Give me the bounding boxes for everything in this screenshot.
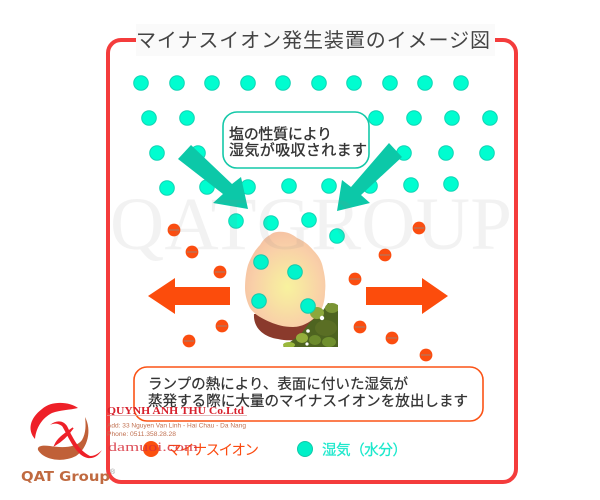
- watermark: QATGROUP: [110, 183, 512, 266]
- title: [136, 24, 495, 56]
- moisture dots on lamp: [252, 255, 315, 313]
- legend: moisture: 湿気（水分）: [322, 442, 407, 459]
- salt lamp illustration: [245, 232, 339, 348]
- QAT Group logo: [21, 403, 116, 485]
- company info: Phone: 0511.358.28.28: [107, 431, 177, 438]
- arrow: moisture in from left: [178, 145, 248, 209]
- callout: salt absorbs moisture: 塩の性質により: [229, 125, 332, 143]
- company info: Add: 33 Nguyen Van Linh - Hai Chau - Da Nang: [107, 422, 247, 430]
- callout: salt absorbs moisture: 湿気が吸収されます: [229, 142, 367, 159]
- company info: QUYNH ANH THU Co.Ltd: [107, 406, 244, 417]
- arrow: ions out to left: [148, 278, 230, 314]
- negative ions: [168, 222, 432, 361]
- caption box: ランプの熱により、表面に付いた湿気が: [148, 376, 408, 393]
- company info: damuoi.com: [108, 439, 198, 454]
- frame: [108, 40, 516, 482]
- registered mark: ®: [110, 468, 116, 476]
- callout: salt absorbs moisture: [223, 112, 369, 168]
- plant: [283, 303, 339, 348]
- company info: [107, 406, 247, 454]
- logo wordmark: QAT Group: [21, 470, 110, 485]
- caption box: [134, 367, 483, 421]
- legend: negative ions: マイナスイオン: [167, 443, 259, 459]
- caption box: 蒸発する際に大量のマイナスイオンを放出します: [148, 393, 468, 410]
- arrow: ions out to right: [366, 278, 448, 314]
- moisture dots: [134, 76, 497, 243]
- title: マイナスイオン発生装置のイメージ図: [136, 29, 490, 52]
- arrow: moisture in from right: [337, 143, 402, 211]
- lamp body: [245, 232, 325, 327]
- logo mark: [31, 403, 102, 460]
- lamp base: [254, 314, 321, 340]
